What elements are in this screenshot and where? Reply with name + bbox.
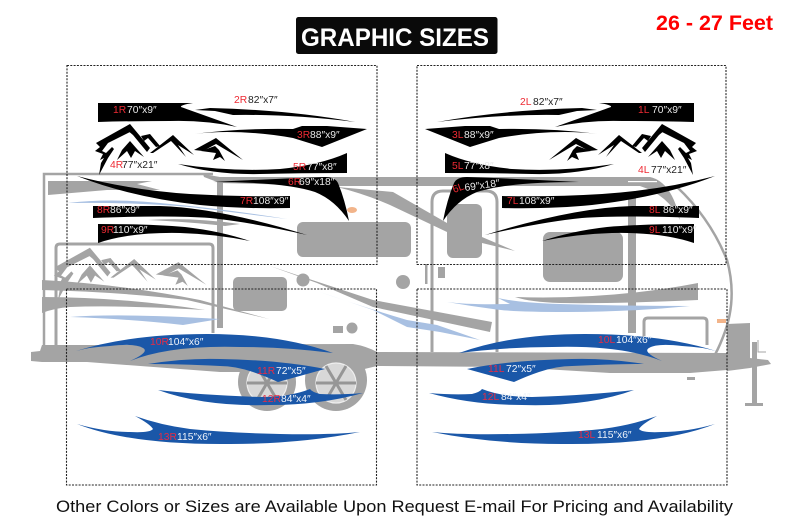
graphic 12L: 12L xyxy=(482,392,499,403)
tongue and jack xyxy=(687,323,771,406)
graphic 1L: 1L xyxy=(638,105,650,116)
graphic 9L xyxy=(542,224,697,243)
graphic 6L xyxy=(443,177,579,221)
graphic 1R: 70″x9″ xyxy=(127,105,157,116)
graphic 13L xyxy=(432,416,715,444)
gray stripes xyxy=(42,181,698,332)
graphic 3L: 88″x9″ xyxy=(464,130,494,141)
light blue swoosh right side xyxy=(68,200,287,219)
graphic 11R: 72″x5″ xyxy=(276,366,306,377)
graphic 10L: 10L xyxy=(598,335,615,346)
graphic 6L: 6L xyxy=(451,181,466,196)
graphic 3L: 3L xyxy=(452,130,464,141)
graphic 13R: 115″x6″ xyxy=(177,432,212,443)
graphic 11R xyxy=(148,359,325,382)
graphic 13R: 13R xyxy=(158,432,177,443)
windows xyxy=(233,204,623,311)
graphic 7L xyxy=(502,176,715,208)
graphic 1L xyxy=(555,103,694,127)
mountain decal outline xyxy=(54,248,206,300)
graphic 12L xyxy=(429,389,634,405)
graphic 7R: 7R xyxy=(240,196,253,207)
graphic 10R xyxy=(76,334,333,361)
graphic 5R xyxy=(178,153,347,174)
graphic 4R mountains: 77″x21″ xyxy=(122,160,158,171)
graphic 10L: 104″x6″ xyxy=(616,335,652,346)
graphic 11L: 11L xyxy=(488,364,505,375)
graphic 2L: 2L xyxy=(520,97,532,108)
trailer silhouette xyxy=(31,174,771,411)
graphic 2R xyxy=(195,95,355,122)
length label: 26 - 27 Feet xyxy=(656,12,773,35)
graphic 5L: 77″x8″ xyxy=(464,161,494,172)
chassis xyxy=(31,344,727,373)
graphic 9R xyxy=(98,224,250,243)
graphic 7R: 108″x9″ xyxy=(253,196,289,207)
graphic 2L xyxy=(437,97,597,122)
graphic 6R: 69″x18″ xyxy=(299,177,335,188)
graphic 2R: 82″x7″ xyxy=(248,95,278,106)
graphic 10R: 104″x6″ xyxy=(168,337,204,348)
graphic 3L xyxy=(425,126,598,147)
graphic 13L: 115″x6″ xyxy=(597,430,632,441)
graphic 12R: 12R xyxy=(262,394,281,405)
graphic 8R: 86″x9″ xyxy=(110,205,140,216)
graphic 8R xyxy=(93,205,307,235)
graphic 11R: 11R xyxy=(257,366,275,377)
side fixtures xyxy=(46,207,726,354)
title: GRAPHIC SIZES xyxy=(301,24,489,52)
graphic 4R mountains: 4R xyxy=(110,160,123,171)
dashed region: top right xyxy=(417,66,726,264)
tandem wheels xyxy=(238,349,367,411)
dashed region: top left xyxy=(67,66,377,264)
graphic 4L mountains: 4L xyxy=(638,165,650,176)
graphic 9R: 110″x9″ xyxy=(113,225,148,236)
graphic 7R xyxy=(77,176,290,208)
graphic 3R: 88″x9″ xyxy=(310,130,340,141)
graphic 6L: 69″x18″ xyxy=(464,178,501,194)
graphic 11L xyxy=(467,359,644,382)
graphic 4R mountains xyxy=(95,124,243,175)
graphic 12L: 84″x4″ xyxy=(501,392,531,403)
graphic 7L: 7L xyxy=(507,196,519,207)
graphic 9L: 9L xyxy=(649,225,661,236)
graphic 8L: 8L xyxy=(649,205,661,216)
graphic 13L: 13L xyxy=(578,430,595,441)
dashed region: bottom right xyxy=(417,289,727,485)
graphic 1R xyxy=(98,103,237,127)
graphic 10R: 10R xyxy=(150,337,169,348)
graphic 6R: 6R xyxy=(288,177,301,188)
graphic 9R: 9R xyxy=(101,225,114,236)
graphic 3R: 3R xyxy=(297,130,310,141)
graphic 3R xyxy=(194,126,367,147)
graphic 4L mountains: 77″x21″ xyxy=(651,165,687,176)
light blue stripes xyxy=(70,291,690,340)
graphic 12R: 84″x4″ xyxy=(281,394,311,405)
graphic 9L: 110″x9″ xyxy=(662,225,697,236)
graphic 10L xyxy=(459,334,716,361)
graphic 5L xyxy=(445,153,614,174)
graphic 2R: 2R xyxy=(234,95,247,106)
graphic 8L: 86″x9″ xyxy=(663,205,693,216)
door frame xyxy=(432,191,497,352)
graphic 5L: 5L xyxy=(452,161,464,172)
graphic 4L mountains xyxy=(549,124,697,176)
graphic 1R: 1R xyxy=(113,105,126,116)
trailer body outline xyxy=(44,174,732,360)
graphic 5R: 77″x8″ xyxy=(307,162,337,173)
graphic 13R xyxy=(77,416,360,444)
graphic 1L: 70″x9″ xyxy=(652,105,682,116)
graphic 6R xyxy=(213,177,349,221)
graphic 5R: 5R xyxy=(293,162,306,173)
graphic 7L: 108″x9″ xyxy=(519,196,555,207)
footer note: Other Colors or Sizes are Available Upon Request E-mail For Pricing and Availability xyxy=(56,497,734,516)
graphic 8R: 8R xyxy=(97,205,110,216)
graphic 8L xyxy=(485,205,699,235)
graphic 11L: 72″x5″ xyxy=(506,364,536,375)
graphic 2L: 82″x7″ xyxy=(533,97,563,108)
graphic 12R xyxy=(158,389,363,405)
dashed region: bottom left xyxy=(66,289,376,485)
